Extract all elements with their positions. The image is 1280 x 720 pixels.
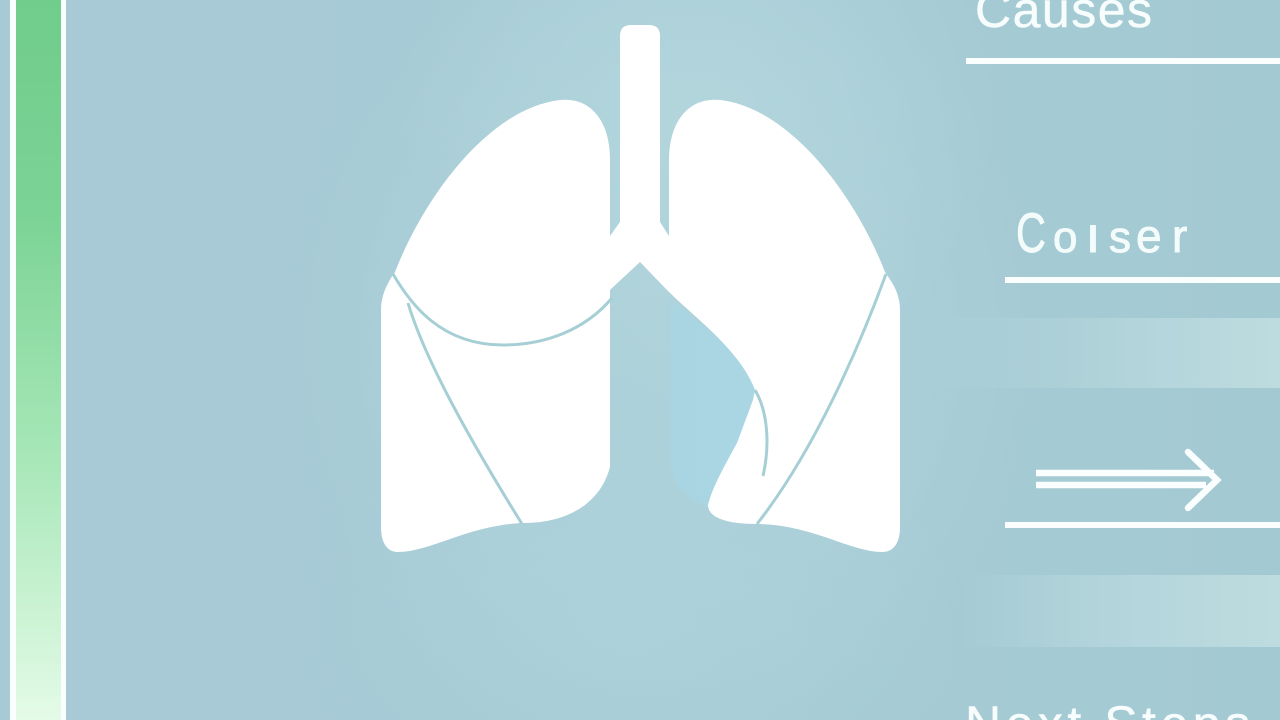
heading: cancer: [1016, 202, 1187, 260]
trachea: [610, 25, 682, 290]
right lung: [640, 100, 900, 552]
heading: cancer: l: [1088, 219, 1098, 260]
lobe lines: [393, 274, 886, 524]
left lung: [381, 100, 610, 552]
arrow icon: [1036, 448, 1222, 512]
pale band lower: [960, 575, 1280, 647]
pale band upper: [925, 318, 1280, 388]
blue lower lobe: [667, 298, 757, 507]
left gradient bar: [10, 0, 66, 720]
